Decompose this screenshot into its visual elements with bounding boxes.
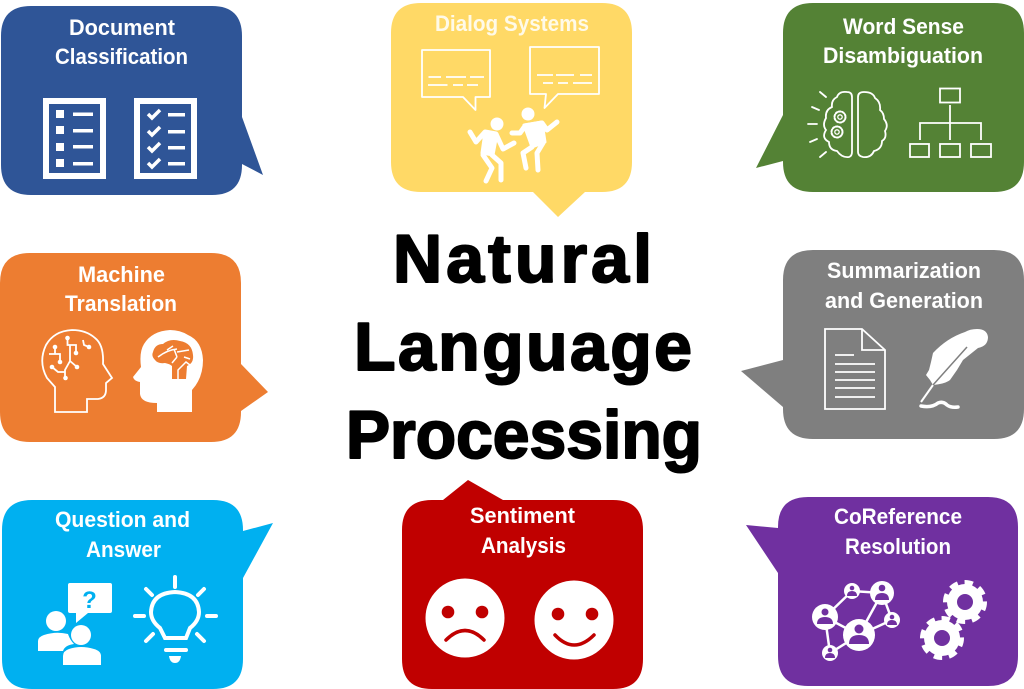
icon: hierarchy chart	[910, 88, 991, 157]
heading: Document Classification: Document	[69, 15, 176, 40]
speech bubble: light blue	[2, 500, 273, 689]
icon: speech bubble left	[422, 50, 490, 110]
heading: Summarization and Generation: Summarization	[827, 258, 981, 283]
icon: light bulb	[135, 577, 216, 663]
panel: Machine Translation	[0, 253, 268, 442]
icon: people network	[812, 581, 900, 661]
panel: Document Classification	[1, 6, 263, 195]
heading: Machine Translation: Translation	[65, 291, 177, 316]
heading: Question and Answer: Answer	[86, 537, 161, 562]
icon: checklist	[137, 101, 194, 176]
icon: head with brain	[133, 330, 203, 412]
icon: sad face	[426, 578, 504, 658]
heading: Word Sense Disambiguation: Disambiguation	[823, 43, 983, 68]
speech bubble: orange	[0, 253, 268, 442]
heading: Machine Translation	[65, 262, 177, 316]
panel: Sentiment Analysis	[402, 480, 643, 689]
speech bubble: gray	[741, 250, 1024, 439]
icon: brain with gears	[808, 92, 887, 157]
panel: Summarization and Generation	[741, 250, 1024, 439]
icon: people with question	[38, 583, 112, 665]
speech bubble: red	[402, 480, 643, 689]
heading: Summarization and Generation	[825, 258, 983, 313]
speech bubble: blue	[1, 6, 263, 195]
heading: CoReference Resolution: CoReference	[834, 504, 962, 529]
panel: CoReference Resolution	[746, 497, 1018, 686]
heading: Document Classification: Classification	[55, 44, 188, 69]
heading: Summarization and Generation: and Generation	[825, 288, 983, 313]
title: Natural Language Processing	[346, 221, 702, 473]
speech bubble: purple	[746, 497, 1018, 686]
heading: Question and Answer: Question and	[55, 507, 190, 532]
icon: feather quill	[921, 329, 988, 407]
heading: Sentiment Analysis	[470, 503, 576, 558]
heading: Sentiment Analysis: Analysis	[481, 533, 566, 558]
heading: Word Sense Disambiguation: Word Sense	[843, 14, 964, 39]
icon: people with question: ?	[82, 587, 97, 614]
heading: Word Sense Disambiguation	[823, 14, 983, 68]
icon: happy face	[534, 580, 614, 660]
heading: Sentiment Analysis: Sentiment	[470, 503, 576, 528]
speech bubble: yellow	[391, 3, 632, 217]
icon: bullet list	[46, 101, 103, 176]
panel: Word Sense Disambiguation	[756, 3, 1024, 192]
panel: Question and Answer	[2, 500, 273, 689]
panel: Dialog Systems	[391, 3, 632, 217]
icon: speech bubble right	[530, 47, 599, 108]
speech bubble: green	[756, 3, 1024, 192]
heading: CoReference Resolution: Resolution	[845, 534, 951, 559]
heading: Document Classification	[55, 15, 188, 69]
icon: AI head outline	[42, 330, 112, 412]
heading: Dialog Systems: Dialog Systems	[435, 11, 589, 36]
heading: Machine Translation: Machine	[78, 262, 165, 287]
title: Natural Language Processing: Language	[354, 309, 692, 385]
icon: document	[825, 329, 885, 409]
icon: two people	[470, 108, 557, 181]
title: Natural Language Processing: Processing	[346, 397, 702, 473]
heading: Question and Answer	[55, 507, 190, 562]
icon: gears	[923, 583, 984, 657]
heading: CoReference Resolution	[834, 504, 962, 559]
title: Natural Language Processing: Natural	[393, 221, 652, 297]
